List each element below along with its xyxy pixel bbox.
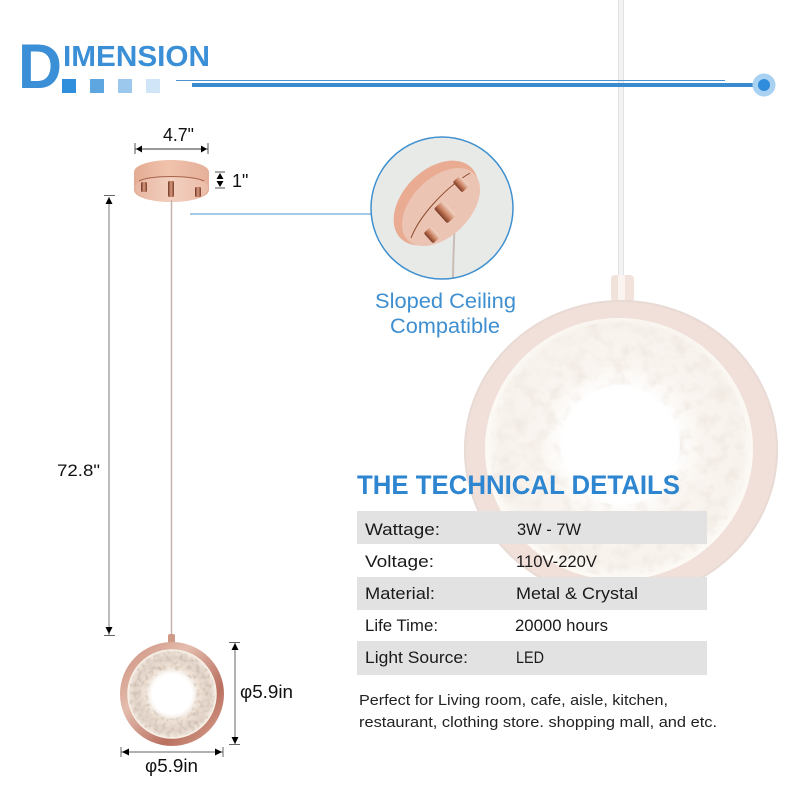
row: voltage: 110V-220V [516, 553, 597, 571]
canopy height dimension [215, 171, 248, 191]
heading: technical details: THE TECHNICAL DETAILS [357, 470, 680, 500]
canopy width dimension [135, 125, 208, 154]
callout label: Compatible [390, 315, 500, 338]
title: DIMENSION: D [18, 32, 62, 102]
callout: sloped canopy close-up [371, 137, 513, 282]
usage description: Perfect for Living room, cafe, aisle, kitchen, [359, 692, 668, 709]
row: wattage: 3W - 7W [517, 521, 581, 539]
row: light source: Light Source: [365, 649, 468, 667]
title: DIMENSION [18, 32, 210, 102]
usage description: restaurant, clothing store. shopping mall, and etc. [359, 714, 717, 731]
ceiling canopy [134, 160, 209, 202]
header rule with dot [176, 74, 776, 96]
callout label [375, 290, 516, 338]
usage description [359, 692, 717, 731]
row: life time [365, 617, 608, 635]
canopy height dimension: 1" [232, 171, 248, 191]
row: wattage [357, 511, 707, 544]
callout connector [190, 213, 371, 215]
specs table [357, 511, 707, 675]
pendant lamp [120, 634, 224, 746]
row: material: Material: [365, 585, 435, 603]
row: wattage: Wattage: [365, 521, 440, 539]
row: life time: Life Time: [365, 617, 438, 635]
overall height dimension: 72.8" [57, 461, 100, 480]
overall height dimension [57, 196, 115, 636]
row: material [357, 577, 707, 610]
row: life time: 20000 hours [515, 617, 608, 635]
row: light source: LED [516, 649, 544, 667]
canopy width dimension: 4.7" [163, 125, 194, 145]
pendant width dimension: φ5.9in [145, 756, 198, 776]
pendant height dimension: φ5.9in [240, 682, 293, 702]
hanging wire [170, 200, 172, 636]
title squares [62, 79, 160, 93]
pendant width dimension [121, 747, 223, 776]
row: voltage [365, 553, 597, 571]
row: voltage: Voltage: [365, 553, 434, 571]
background lamp photo (faded) [464, 0, 778, 600]
row: light source [357, 641, 707, 675]
callout label: Sloped Ceiling [375, 290, 516, 313]
title: DIMENSION: IMENSION [63, 41, 210, 73]
pendant height dimension [229, 642, 293, 744]
row: material: Metal & Crystal [516, 585, 638, 603]
